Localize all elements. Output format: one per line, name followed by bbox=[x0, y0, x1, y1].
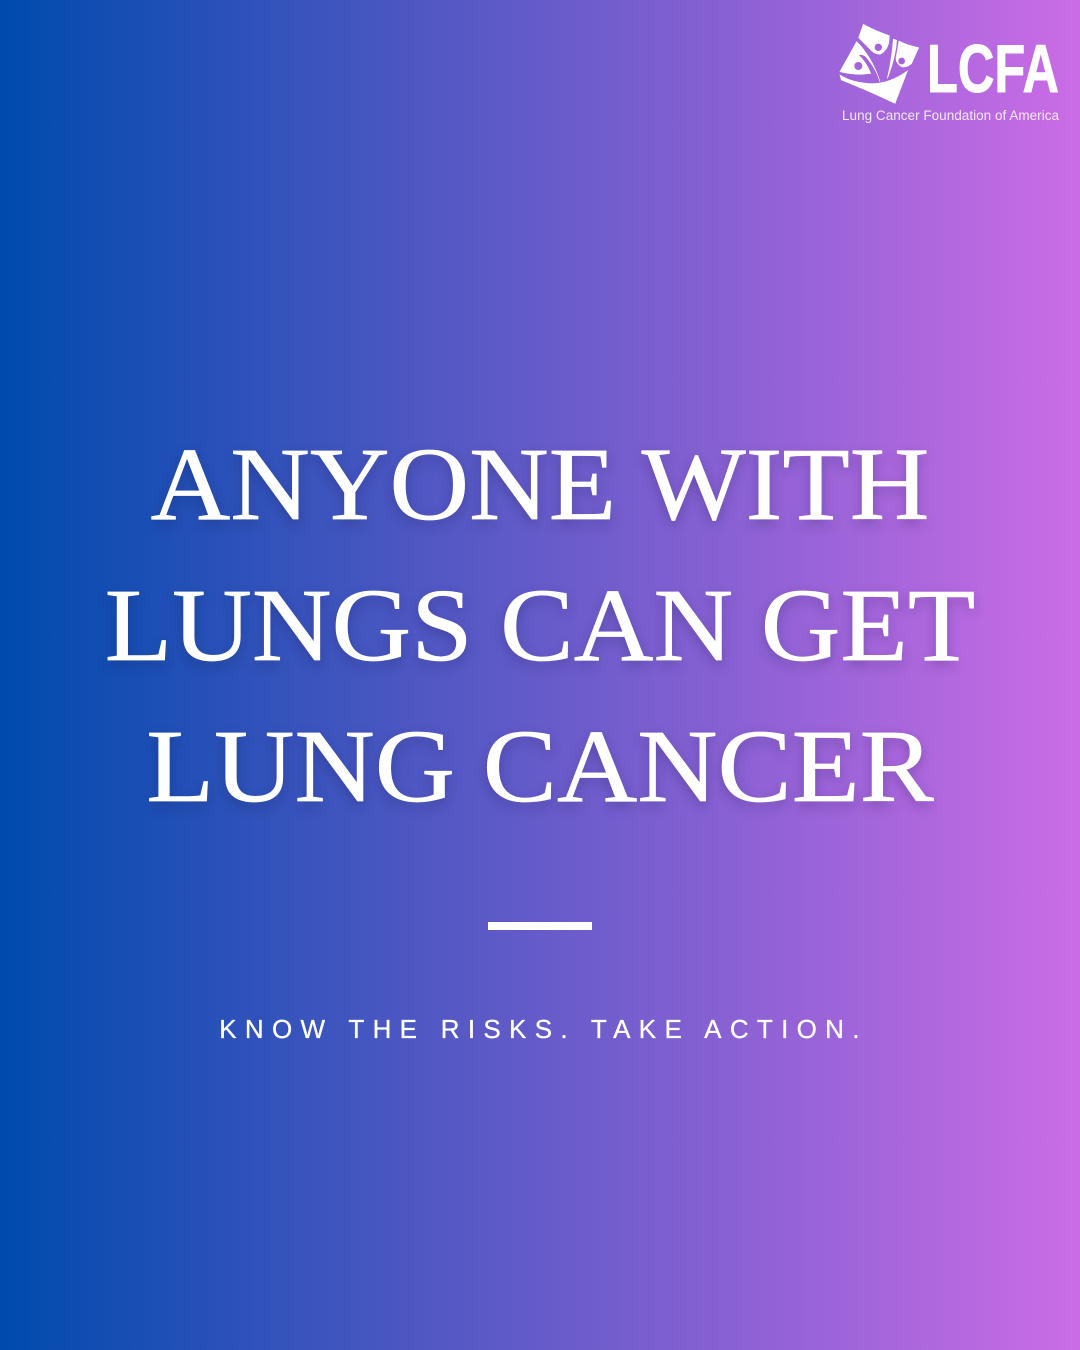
logo: LCFA bbox=[840, 24, 1059, 123]
icon: LCFA emblem bbox=[840, 24, 919, 103]
logo tagline: Lung Cancer Foundation of America bbox=[842, 108, 1059, 123]
headline line 3: LUNG CANCER bbox=[146, 709, 934, 824]
tagline: KNOW THE RISKS. TAKE ACTION. bbox=[219, 1014, 868, 1044]
headline bbox=[105, 427, 977, 824]
divider bar bbox=[488, 922, 592, 930]
headline line 1: ANYONE WITH bbox=[151, 427, 929, 542]
headline line 2: LUNGS CAN GET bbox=[105, 568, 975, 683]
